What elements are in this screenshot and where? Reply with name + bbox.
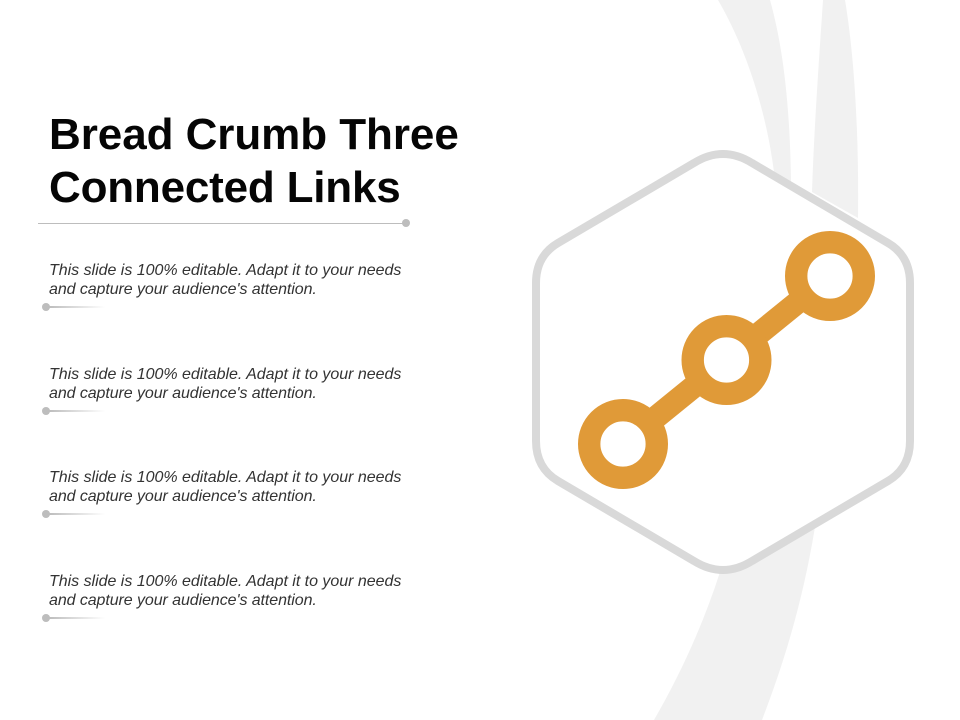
text block 3 <box>42 469 401 518</box>
text block 1 <box>42 262 401 311</box>
text block 4: and capture your audience's attention. <box>49 592 317 609</box>
text block 1: This slide is 100% editable. Adapt it to your needs <box>49 262 401 279</box>
text block 2 <box>42 366 401 415</box>
title divider with end dot <box>38 219 410 227</box>
text block 4 <box>42 573 401 622</box>
link connector bars <box>623 276 830 444</box>
icon: three connected links <box>589 242 864 478</box>
link ring: middle <box>693 326 760 394</box>
text block 1: and capture your audience's attention. <box>49 281 317 298</box>
hexagon outline <box>536 154 910 570</box>
swoosh: lower band <box>654 527 815 720</box>
link ring: upper right <box>796 242 864 310</box>
link ring: lower left <box>589 410 657 478</box>
text block 4: This slide is 100% editable. Adapt it to your needs <box>49 573 401 590</box>
title: Bread Crumb Three <box>49 110 459 159</box>
swoosh: upper right band <box>812 0 858 218</box>
title: Connected Links <box>49 163 400 212</box>
text block 3: and capture your audience's attention. <box>49 488 317 505</box>
swoosh: upper left band <box>718 0 791 182</box>
title <box>49 110 459 212</box>
text block 2: and capture your audience's attention. <box>49 385 317 402</box>
text block 3: This slide is 100% editable. Adapt it to your needs <box>49 469 401 486</box>
text block 2: This slide is 100% editable. Adapt it to your needs <box>49 366 401 383</box>
